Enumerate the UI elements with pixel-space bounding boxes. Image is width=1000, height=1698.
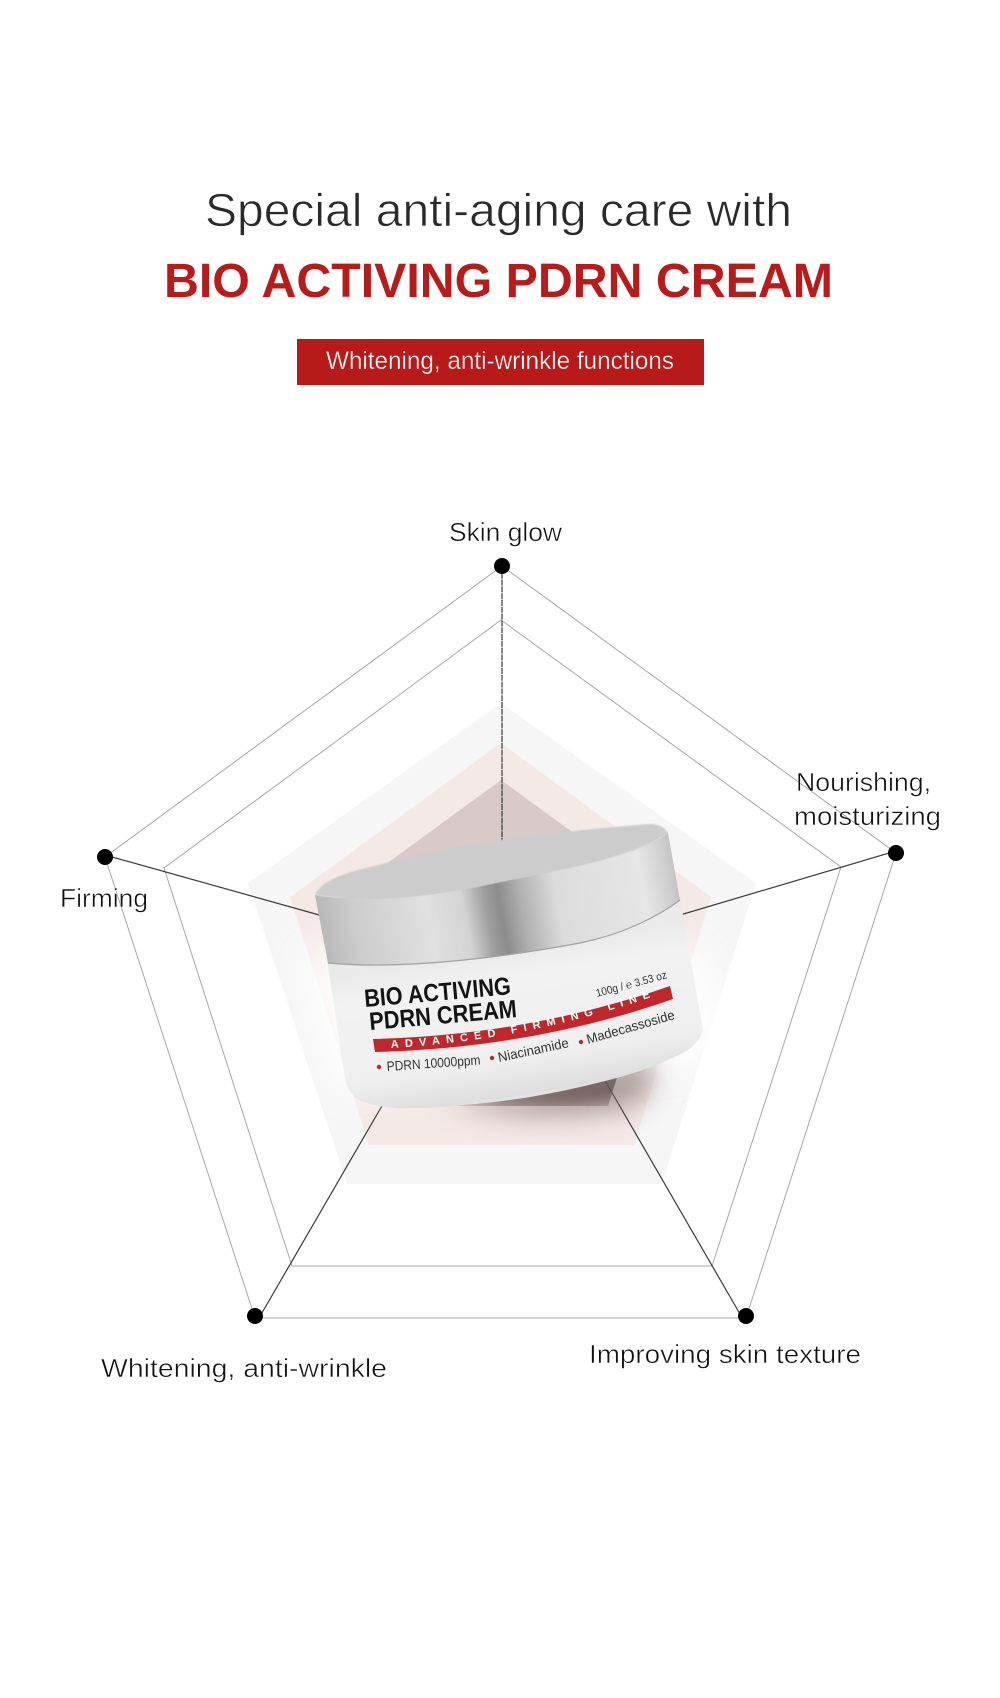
inner pentagon grid [164,620,841,1266]
axis label: nourishing, moisturizing: Nourishing, [796,767,931,797]
jar label: product name: BIO ACTIVING [363,972,512,1013]
axes [105,566,896,1318]
jar contact shadow [469,1078,617,1106]
subtitle badge: Whitening, anti-wrinkle functions [326,347,674,375]
jar label: product name [363,972,518,1036]
axis dots [97,558,904,1324]
axis label: nourishing, moisturizing [794,767,941,831]
axis label: nourishing, moisturizing: moisturizing [794,801,941,831]
lid top [315,824,668,899]
radar chart [97,558,904,1324]
axis label: improving skin texture: Improving skin texture [589,1339,861,1369]
title line 1: Special anti-aging care with [205,184,792,236]
jar label: ingredients [377,1007,676,1074]
outer pentagon grid [105,566,896,1318]
jar label: ingredients: PDRN 10000ppm [386,1052,481,1074]
subtitle badge [297,339,704,385]
jar label: red band [373,986,673,1052]
jar body [327,898,703,1108]
data area: dusty rose [330,780,672,1106]
product jar [310,824,702,1132]
lid groove [328,900,680,965]
data area: light gray [248,703,756,1184]
jar white glow [298,950,732,1090]
lid side [315,833,680,965]
jar label: size: 100g / ℮ 3.53 oz [595,969,668,1000]
axis label: skin glow: Skin glow [449,517,562,547]
axis label: firming: Firming [60,883,148,913]
title line 2: BIO ACTIVING PDRN CREAM [164,255,833,308]
jar label: product name: PDRN CREAM [368,995,518,1036]
jar label: ingredients: Niacinamide [497,1035,570,1065]
jar soft shadow [440,1055,653,1115]
jar label: band text: ADVANCED FIRMING LINE [391,990,650,1048]
jar label: ingredients: Madecassoside [585,1007,676,1047]
axis label: whitening, anti-wrinkle: Whitening, anti-wrinkle [101,1353,387,1383]
data area: light pink [290,743,711,1145]
